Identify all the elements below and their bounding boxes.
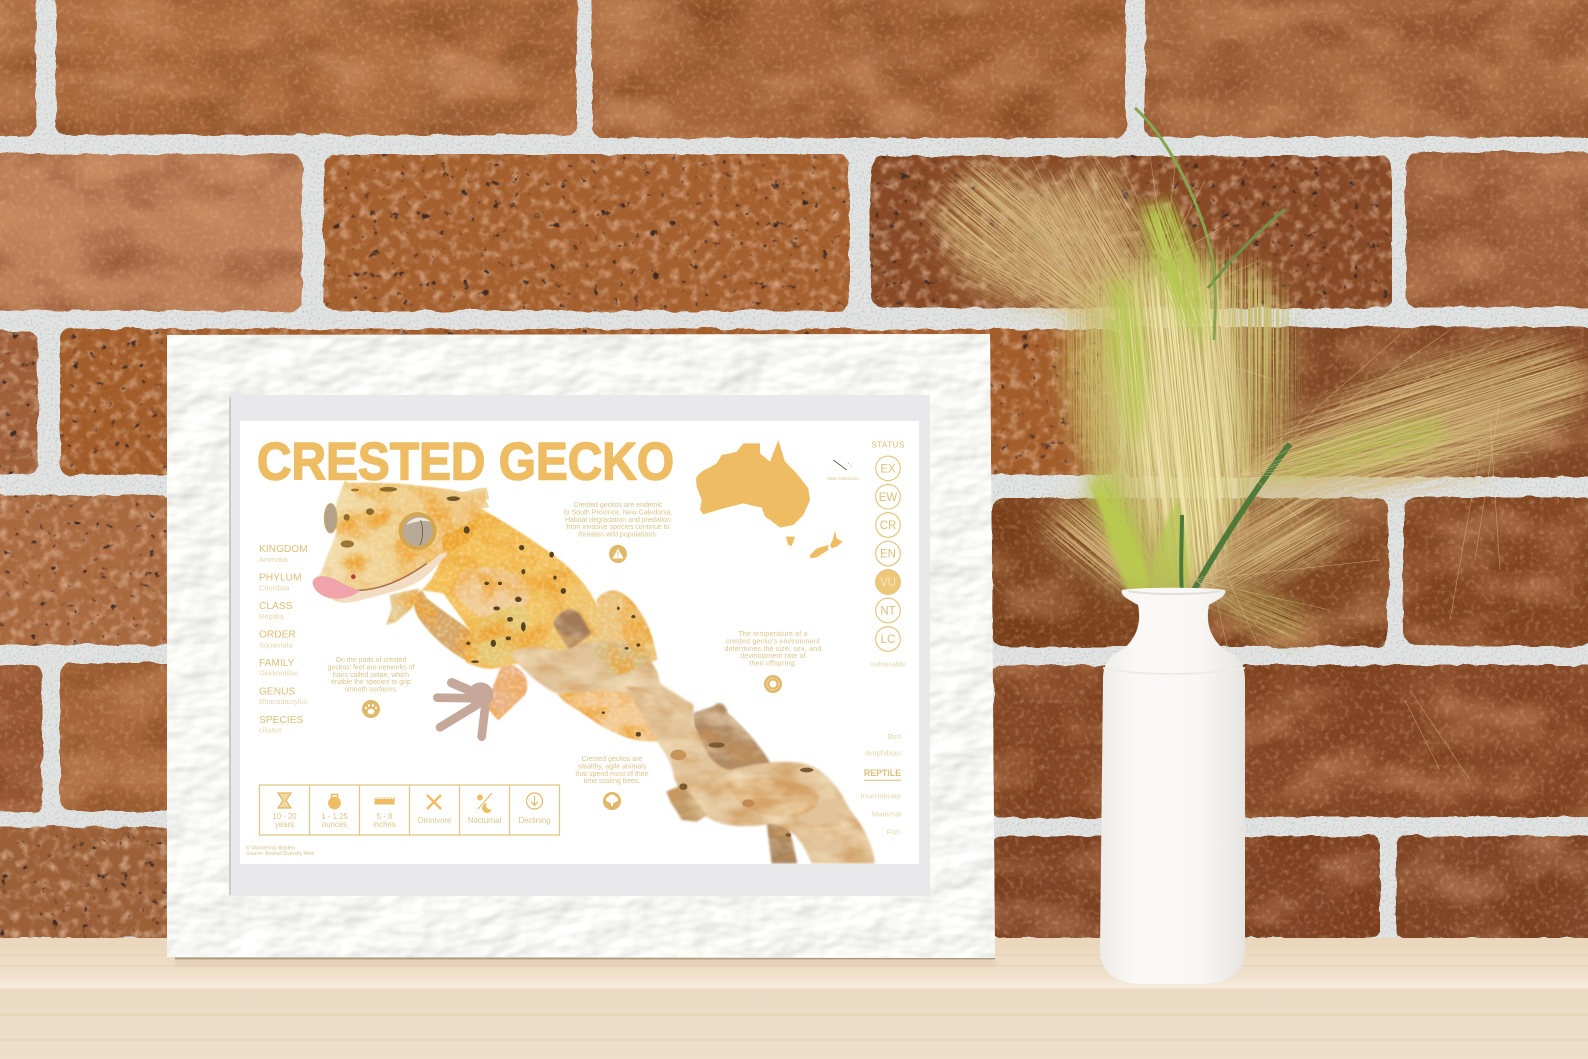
animal class list: Amphibian [865,748,901,758]
vase [1100,588,1245,984]
taxonomy list: Rhacodactylus [259,697,308,706]
main lower branch [627,687,875,863]
stat: weight: ounces [322,820,347,829]
flank [470,605,530,665]
plume: lower right drooping [1189,569,1308,644]
taxonomy list: CLASS [259,601,293,612]
taxonomy list: FAMILY [259,658,295,669]
stat: weight: 1 - 1.25 [321,812,348,821]
animal class list: Fish [887,828,901,836]
poster credit: © Wandering Walden [246,844,295,852]
solid green base tufts [1095,475,1190,592]
conservation status scale: NT [880,606,896,618]
forefoot under chin [386,588,420,625]
picture mat [229,395,930,896]
nostril [351,574,356,579]
poster credit: Source: Animal Diversity Web [246,851,314,857]
plant leaves [1135,108,1290,592]
fact: setae on feet: smooth surfaces. [344,687,398,694]
map: Australia and New Zealand [696,440,859,558]
stat: lifespan [272,793,297,829]
gecko spots [341,487,641,737]
fact: temperature: development rate of [740,653,806,660]
plume: lower left [1040,491,1168,612]
gecko head [313,483,486,602]
taxonomy list: Reptilia [259,612,285,621]
fact: setae on feet: hairs called setae, which [333,672,409,679]
fact: setae on feet: On the pads of crested [336,657,407,664]
stat: activity: Nocturnal [468,816,501,825]
taxonomy list [259,544,308,734]
icon: paw [362,700,380,718]
wooden shelf [0,938,1588,1059]
stat: diet: Omnivore [418,816,451,825]
fact: arboreal: that spend most of their [575,771,649,778]
conservation status scale: STATUS [871,440,905,450]
plume strands [958,150,1585,780]
fact: setae on feet: geckos' feet are networks of [328,664,415,671]
taxonomy list: Chordata [259,584,290,592]
fact: temperature: determines the size, sex, and [725,646,821,653]
conservation status scale: CR [880,520,896,532]
poster title: CRESTED GECKO [257,432,674,492]
stat: length [373,797,396,829]
taxonomy list: ciliatus [259,726,282,734]
branch knots [670,742,813,837]
icon: sun [764,675,782,693]
map: New Caledonia [827,460,859,481]
conservation status scale: vulnerable [870,660,906,668]
taxonomy list: Animalia [259,555,288,564]
front arm [483,662,527,720]
conservation status scale [870,440,906,668]
plume: lower right [1172,479,1347,621]
fact: endemic range: threaten wild populations. [578,532,658,539]
hind foot on branch [593,642,649,676]
rear branch [693,703,797,863]
plume: right fan [1231,412,1502,512]
conservation status scale: EX [880,464,896,476]
front hand [437,682,493,737]
soft plume masses [960,179,1585,600]
fact: setae on feet: enable the species to grip [331,679,411,686]
stat: activity [468,793,501,825]
conservation status scale: VU [880,577,896,589]
plume: central cream [1106,265,1260,596]
animal class list: Mammal [872,810,901,818]
stat: lifespan: years [275,820,294,829]
conservation status scale: EN [880,549,896,561]
icon: tree [603,792,621,810]
animal class list: Bird [887,732,901,741]
plume: central mass tilted [1057,309,1246,604]
fact: setae on feet [328,657,415,694]
fact: endemic range: Habitat degradation and predation [565,517,671,524]
map: New Caledonia: New Caledonia [827,476,859,481]
plume: base green [1083,471,1170,598]
fact: temperature [725,631,821,668]
taxonomy list: ORDER [259,630,296,640]
hidden foreleg [413,590,471,661]
stat: diet [418,795,451,825]
fact: endemic range: to South Province, New Caledonia. [564,509,672,516]
left eye [324,504,337,533]
fact: arboreal: stealthy, agile animals [578,763,647,770]
plume: central mass [1066,252,1294,590]
taxonomy list: Squamata [259,640,294,650]
plume: left green [1102,279,1154,452]
right eye [399,512,437,550]
conservation status scale: EW [879,492,897,504]
plume: top green [1132,196,1227,358]
fact: arboreal [575,756,649,785]
plant: feather grass [920,108,1588,780]
crest spikes [342,480,489,509]
stat: population trend: Declining [518,816,551,825]
mouth line [343,563,427,590]
taxonomy list: GENUS [259,686,295,698]
gecko body [422,507,607,669]
stat: population trend [518,793,551,825]
taxonomy list: Gekkonidae [259,668,298,678]
plume: upper left fan [954,228,1130,351]
fact: endemic range: Crested geckos are endemic [573,502,663,509]
picture frame [167,334,995,958]
shoulder patch [453,568,530,618]
hind leg [557,687,660,741]
animal class list: Invertebrate [860,792,901,800]
animal class list: REPTILE [864,768,901,778]
stat: length: 5 - 8 [377,812,392,821]
taxonomy list: KINGDOM [259,544,308,555]
plume: right long [1218,318,1588,535]
gecko and branch illustration [313,480,875,863]
fact: endemic range [564,502,672,539]
fact: temperature: their offspring. [749,661,797,668]
fact: temperature: The temperature of a [738,631,808,638]
animal class list [860,732,901,836]
fact: temperature: crested gecko's environment [726,638,820,645]
fact: arboreal: time scaling trees. [584,778,640,785]
stat: lifespan: 10 - 20 [272,812,297,821]
tongue [313,576,360,599]
branch stub [553,610,592,648]
fact: endemic range: from invasive species continue to [566,524,670,531]
conservation status scale: LC [881,634,895,646]
icon: warning [609,545,627,563]
poster credit [246,844,314,857]
rough pitted bricks [0,154,1392,938]
taxonomy list: SPECIES [259,715,303,726]
plume: right green core [1235,410,1449,499]
main upper branch [510,640,695,728]
hip [597,591,657,667]
lower jaw [337,553,447,602]
poster sheet [240,421,919,864]
stat: weight [321,794,348,829]
plume: upper middle [1018,158,1195,361]
orange cheek patch [440,518,476,552]
quick stats table [260,785,560,835]
fact: arboreal: Crested geckos are [582,756,642,763]
stat: length: inches [373,820,396,829]
taxonomy list: PHYLUM [259,572,301,584]
plume: upper left [920,147,1153,366]
